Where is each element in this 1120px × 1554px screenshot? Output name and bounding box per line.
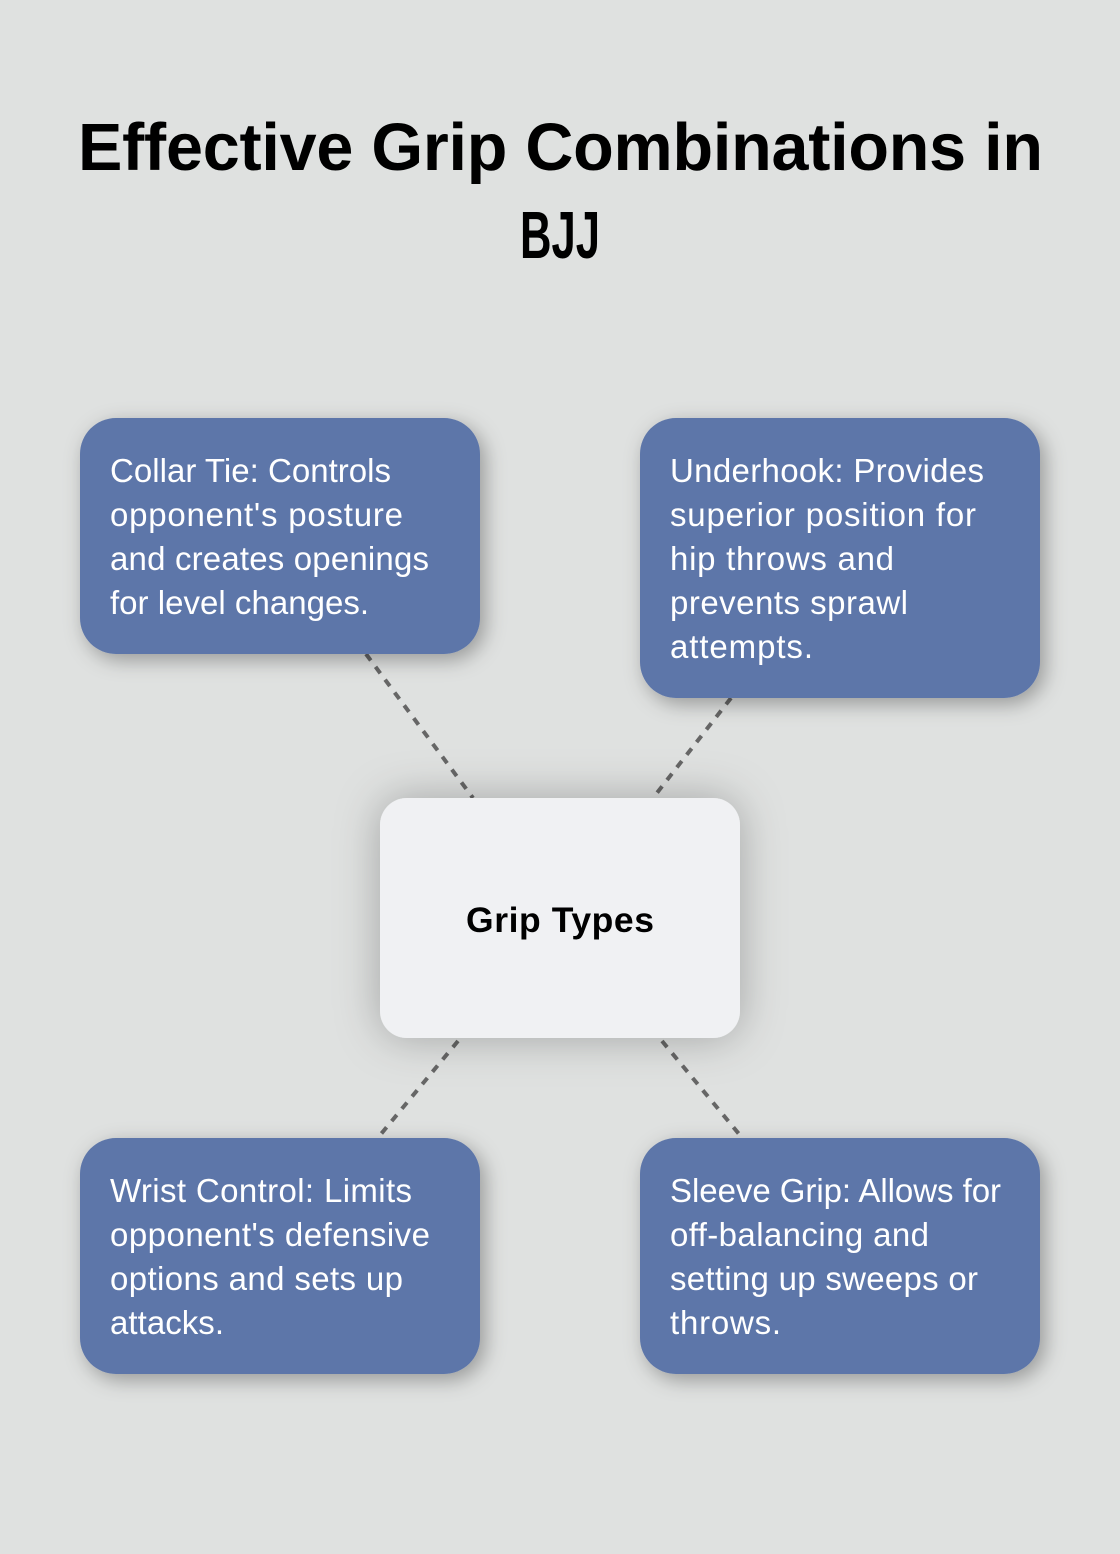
panel: sleeve grip — [640, 1138, 1040, 1374]
panel: collar tie: for level changes. — [110, 584, 369, 621]
panel: underhook: attempts. — [670, 628, 813, 665]
panel: underhook: prevents sprawl — [670, 584, 908, 621]
connector: center to wrist control — [381, 1041, 458, 1134]
panel: sleeve grip: Sleeve Grip: Allows for — [670, 1172, 1001, 1209]
title: Effective Grip Combinations in — [78, 111, 1043, 185]
connector: center to sleeve grip — [662, 1041, 739, 1134]
panel: center grip types: Grip Types — [466, 900, 654, 940]
panel: collar tie: Collar Tie: Controls — [110, 452, 391, 489]
panel: underhook: superior position for — [670, 496, 976, 533]
panel: wrist control: attacks. — [110, 1304, 224, 1341]
panel: underhook — [640, 418, 1040, 698]
panel: underhook: Underhook: Provides — [670, 452, 984, 489]
connector: collar tie to center — [366, 654, 473, 798]
panel: sleeve grip: throws. — [670, 1304, 781, 1341]
panel: sleeve grip: setting up sweeps or — [670, 1260, 978, 1297]
panel: wrist control: Wrist Control: Limits — [110, 1172, 412, 1209]
panel: wrist control: opponent's defensive — [110, 1216, 430, 1253]
panel: wrist control — [80, 1138, 480, 1374]
title — [78, 111, 1043, 273]
panel: collar tie: and creates openings — [110, 540, 429, 577]
panel: collar tie: opponent's posture — [110, 496, 403, 533]
connector: underhook to center — [653, 698, 731, 798]
panel: wrist control: options and sets up — [110, 1260, 403, 1297]
title: BJJ — [520, 199, 600, 273]
panel: underhook: hip throws and — [670, 540, 894, 577]
panel: center grip types — [380, 798, 740, 1038]
panel: sleeve grip: off-balancing and — [670, 1216, 929, 1253]
panel: collar tie — [80, 418, 480, 654]
